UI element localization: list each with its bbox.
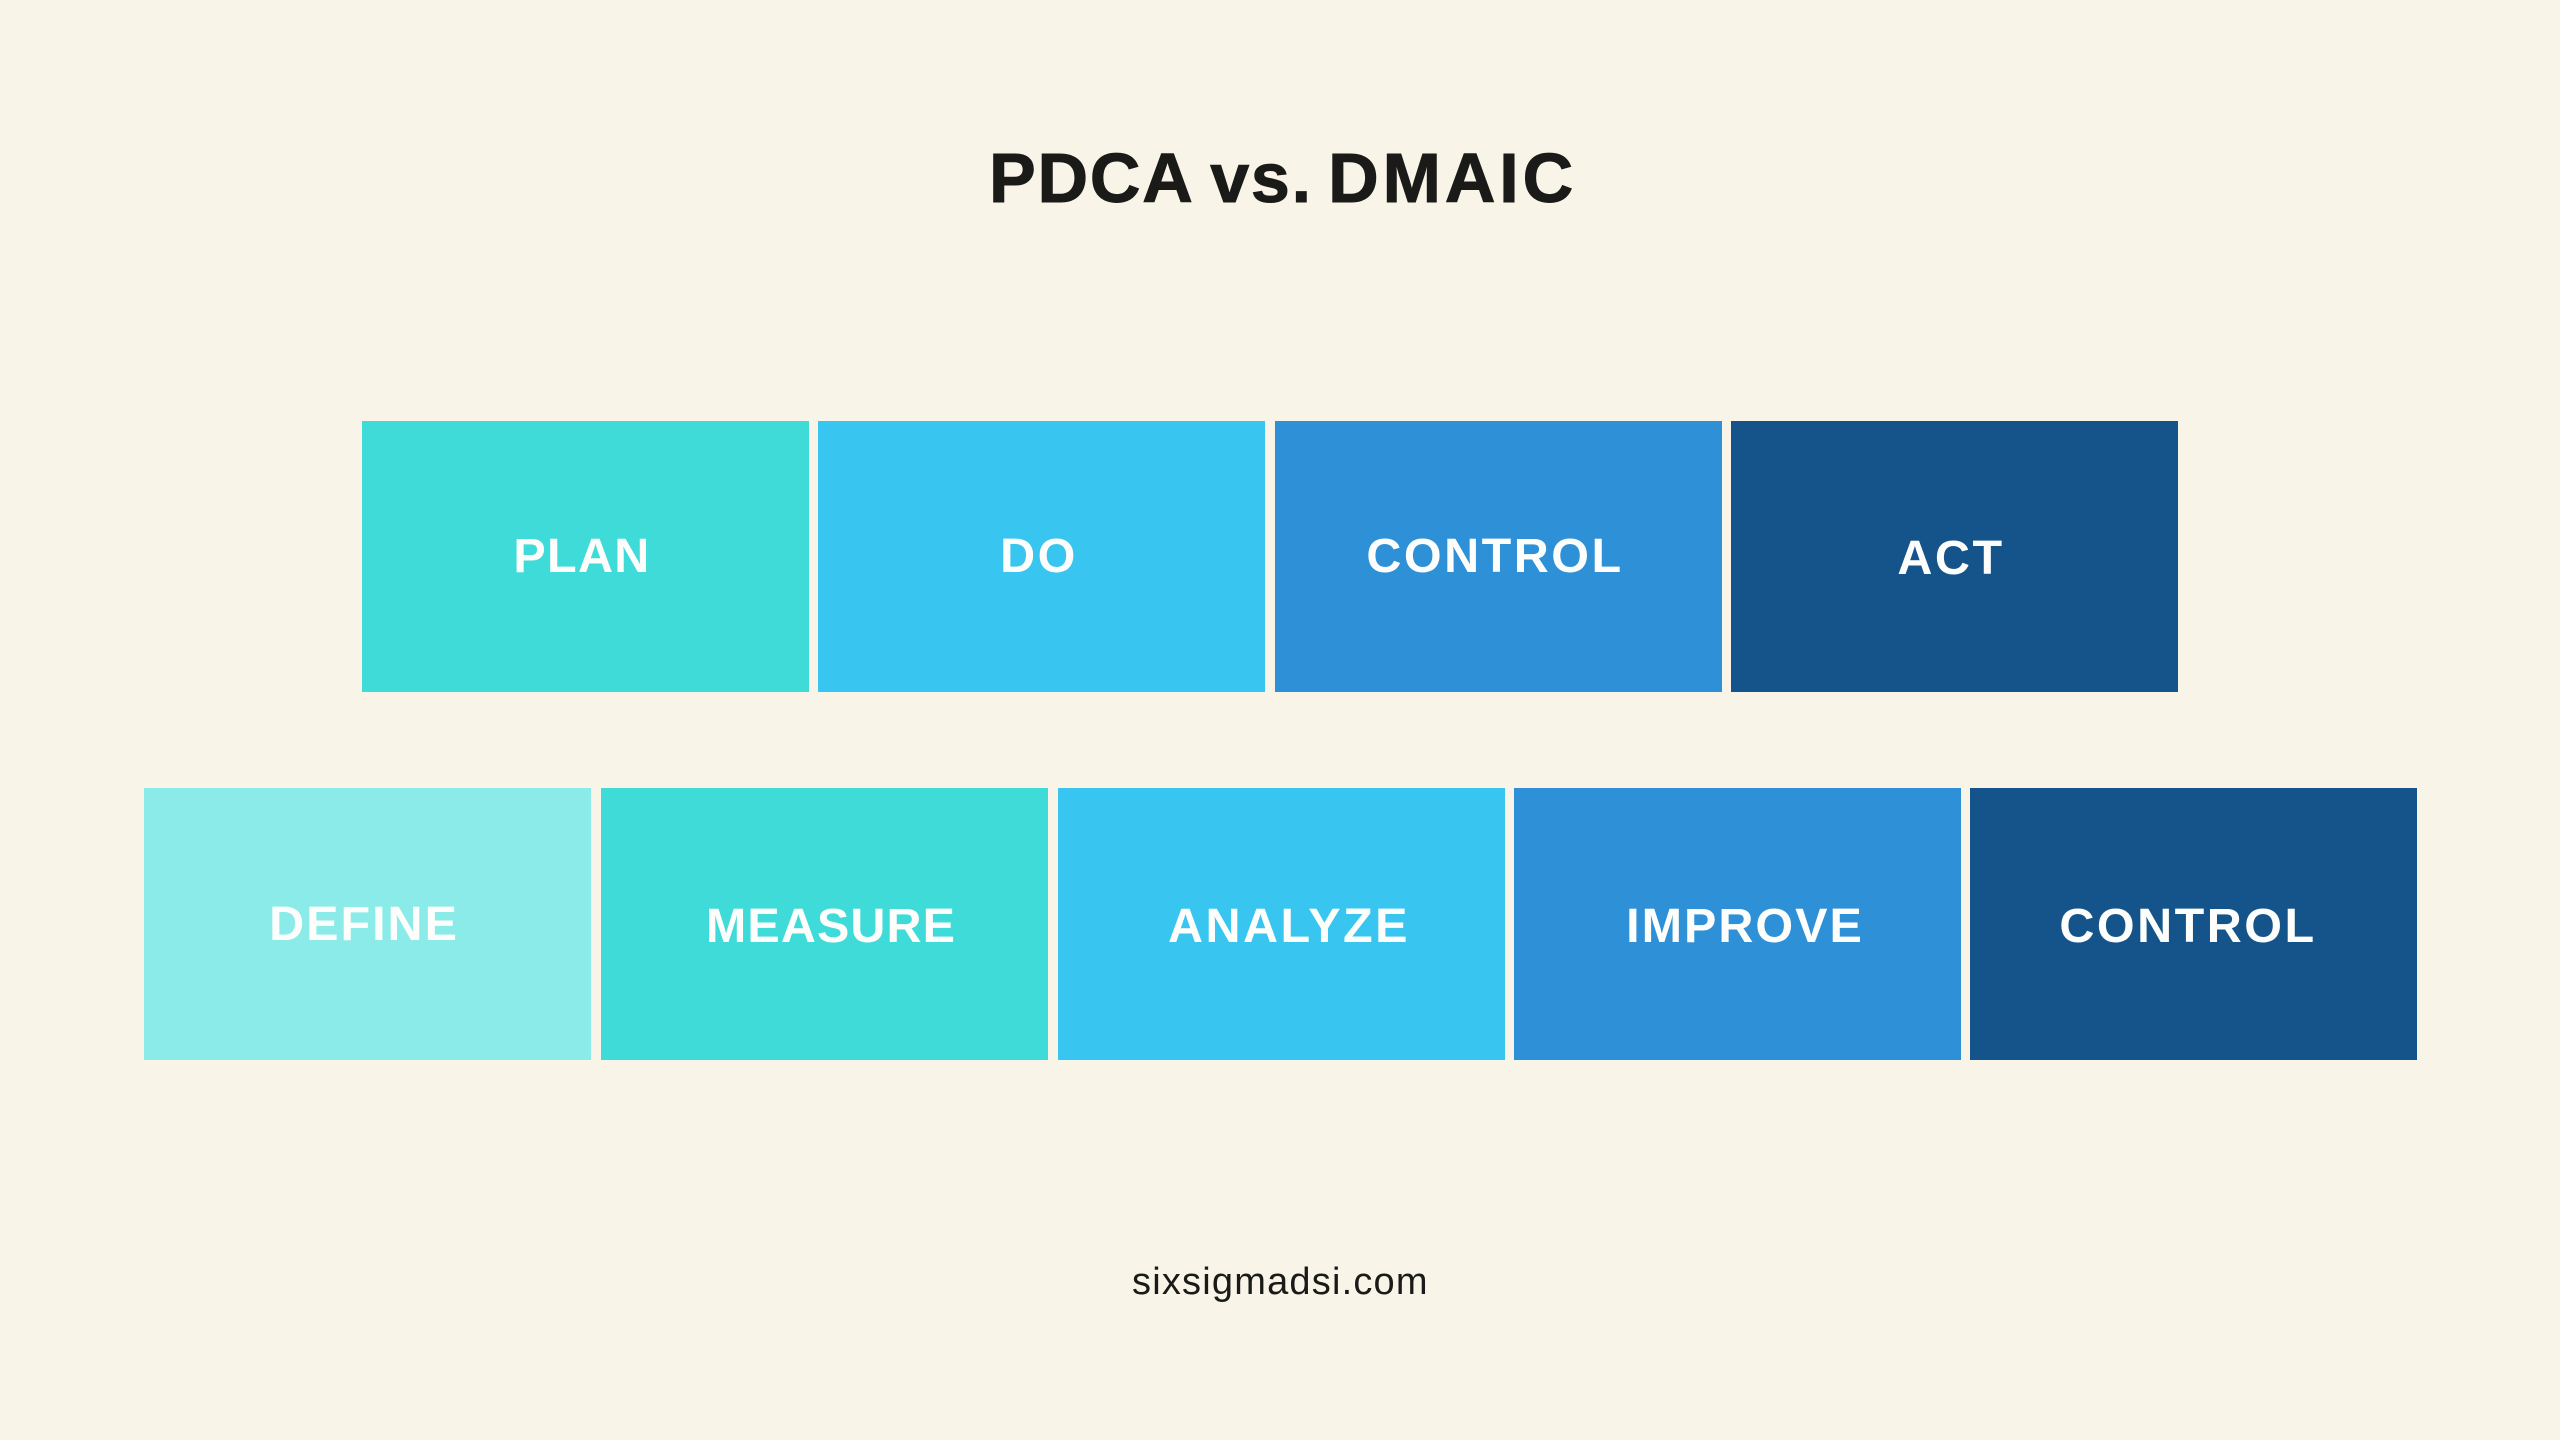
box: CONTROL: CONTROL (1366, 529, 1624, 583)
box: PLAN: PLAN (513, 529, 651, 583)
box: DEFINE: DEFINE (269, 897, 459, 951)
title: PDCA vs. DMAIC (989, 139, 1577, 217)
box: ANALYZE: ANALYZE (1168, 899, 1410, 953)
box: CONTROL: CONTROL (2059, 899, 2317, 953)
box: DO (818, 421, 1265, 692)
box: CONTROL (1275, 421, 1722, 692)
panel: DMAIC row (144, 788, 2417, 1060)
box: DO: DO (1000, 529, 1078, 583)
box: ACT: ACT (1897, 531, 2005, 585)
box: DEFINE (144, 788, 591, 1060)
box: IMPROVE: IMPROVE (1626, 899, 1864, 953)
panel: PDCA row (362, 421, 2178, 692)
box: ANALYZE (1058, 788, 1505, 1060)
box: CONTROL (1970, 788, 2417, 1060)
box: PLAN (362, 421, 809, 692)
footer: website: sixsigmadsi.com (1132, 1261, 1429, 1303)
box: MEASURE (601, 788, 1048, 1060)
box: IMPROVE (1514, 788, 1961, 1060)
box: ACT (1731, 421, 2178, 692)
box: MEASURE: MEASURE (706, 899, 956, 953)
